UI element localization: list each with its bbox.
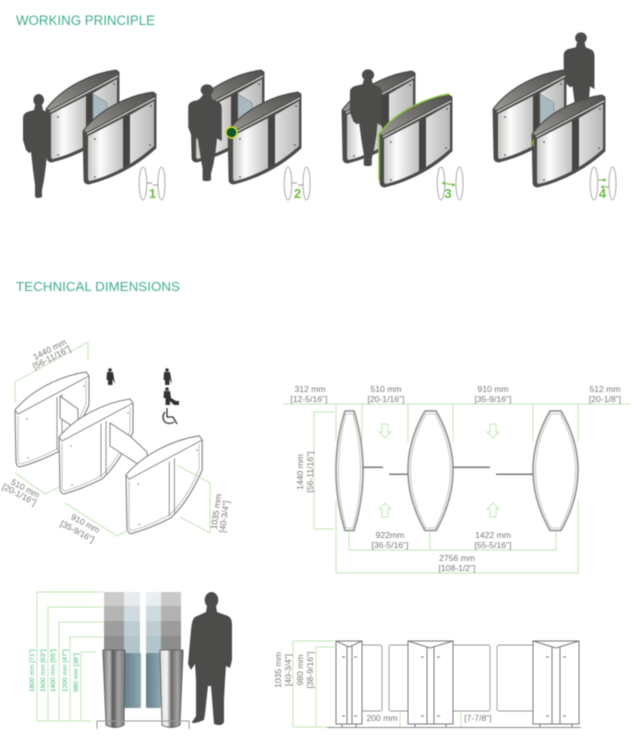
bottom labels: [55-5/16"] [475,540,511,550]
icon: front gate [532,95,605,187]
schematic 1: 1 [149,186,156,201]
ghost gate height steps [104,592,181,653]
gate C [126,436,202,534]
gate 1 [336,641,362,727]
icon: rear gate with flap [493,70,566,162]
flaps [356,645,537,711]
dimension: 510 [1,473,59,507]
floor bracket [97,721,189,729]
bottom labels: [36-5/16"] [372,540,408,550]
title: technical dimensions: TECHNICAL DIMENSIONS [16,279,180,294]
dimension: 510: 510 mm [9,477,41,500]
icon: pedestrian with luggage wide lane [164,368,172,385]
clearance dimension: 200 mm [366,713,398,723]
gate posts [103,650,183,728]
top labels: [12-5/16"] [291,394,327,404]
icon: wheelchair [163,408,177,424]
dimension: 910: 910 mm [69,512,101,535]
height dimensions: 1035 mm [273,652,283,688]
dimension: 1035: [40-3/4"] [217,500,231,533]
top labels: [20-1/16"] [368,394,404,404]
height labels: 1800 mm [71"] [29,649,36,692]
top labels [291,384,621,404]
top labels: 512 mm [589,384,621,394]
panel: side view with heights [29,592,232,729]
inner lens contours [338,414,576,528]
flaps [363,467,533,474]
top dimension lines [283,404,630,442]
bottom labels: 1422 mm [475,530,511,540]
top labels: [35-9/16"] [475,394,511,404]
dimension: 1440: [56-11/16"] [31,344,72,371]
schematic 4 [590,167,616,201]
icon: pedestrian with luggage [106,368,115,385]
height dimension [295,412,334,529]
icon: front gate [228,92,301,184]
glass flaps [124,653,161,708]
passage arrows [379,424,499,517]
height dimensions [273,641,336,727]
gate A [15,372,89,467]
title: working principle: WORKING PRINCIPLE [16,13,155,28]
person approaching [23,94,51,198]
height dimension: [56-11/16"] [305,451,315,493]
flap between gates A and B [60,396,78,430]
icon: sensor detection [226,127,237,138]
person at sensor [188,84,222,181]
bottom labels: 2756 mm [439,553,475,563]
gate B [59,399,133,494]
height dimensions: 980 mm [295,654,305,686]
clearance dimension [366,711,492,727]
bottom labels: 922mm [376,530,404,540]
dimension: 1035 [177,465,231,533]
flap between gates B and C [110,423,147,470]
icon: pedestrian with trolley [164,387,179,405]
bottom labels: [108-1/2"] [439,563,475,573]
gate 3 [533,641,579,727]
icon: front gate [83,92,156,184]
lens gates [336,411,578,530]
icon: rear gate with flap [46,70,119,162]
dimension: 910 [59,503,130,544]
green height leader lines [37,592,103,721]
sensor marker [533,140,534,146]
panel: plan view [283,384,630,573]
top labels: 312 mm [294,384,326,394]
height labels: 1200 mm [47"] [62,649,69,692]
dimension: 1440: 1440 mm [31,337,68,362]
dimension: 910: [35-9/16"] [59,518,96,544]
icon: rear gate open [342,71,415,163]
height labels [29,649,80,692]
panel: step 4 [493,32,616,201]
bottom dimension lines [336,500,578,573]
schematic 1 [139,167,165,201]
height dimensions: [40-3/4"] [283,654,293,686]
panel: step 3 [342,69,463,201]
dimension: 1440 [15,337,88,403]
panel: step 2 [188,70,310,201]
height dimensions: [38-9/16"] [305,652,315,688]
floor line [327,726,581,728]
panel: front elevation [273,641,581,728]
dimension: 1035: 1035 mm [209,493,223,530]
top labels: 910 mm [477,384,509,394]
icon: rear gate [191,70,264,162]
highlighted gate outline [379,94,449,180]
person passing [350,69,382,166]
schematic 2: 2 [294,186,301,201]
bottom labels [372,530,511,573]
top labels: 510 mm [370,384,402,394]
person silhouette [188,592,232,725]
icon: front gate [379,95,452,187]
clearance dimension: [7-7/8"] [464,713,492,723]
height labels: 1600 mm [63"] [40,649,47,692]
gate 2 [408,641,453,727]
panel: step 1 [23,70,165,201]
height labels: 980 mm [38"] [73,653,80,692]
schematic 3: 3 [444,186,452,201]
person exiting [564,32,594,129]
dimension: 510: [20-1/16"] [1,481,38,507]
height labels: 1400 mm [55"] [50,649,57,692]
panel: isometric view [1,337,231,544]
height dimension: 1440 mm [295,454,305,490]
top labels: [20-1/8"] [589,394,621,404]
schematic 4: 4 [599,186,607,201]
